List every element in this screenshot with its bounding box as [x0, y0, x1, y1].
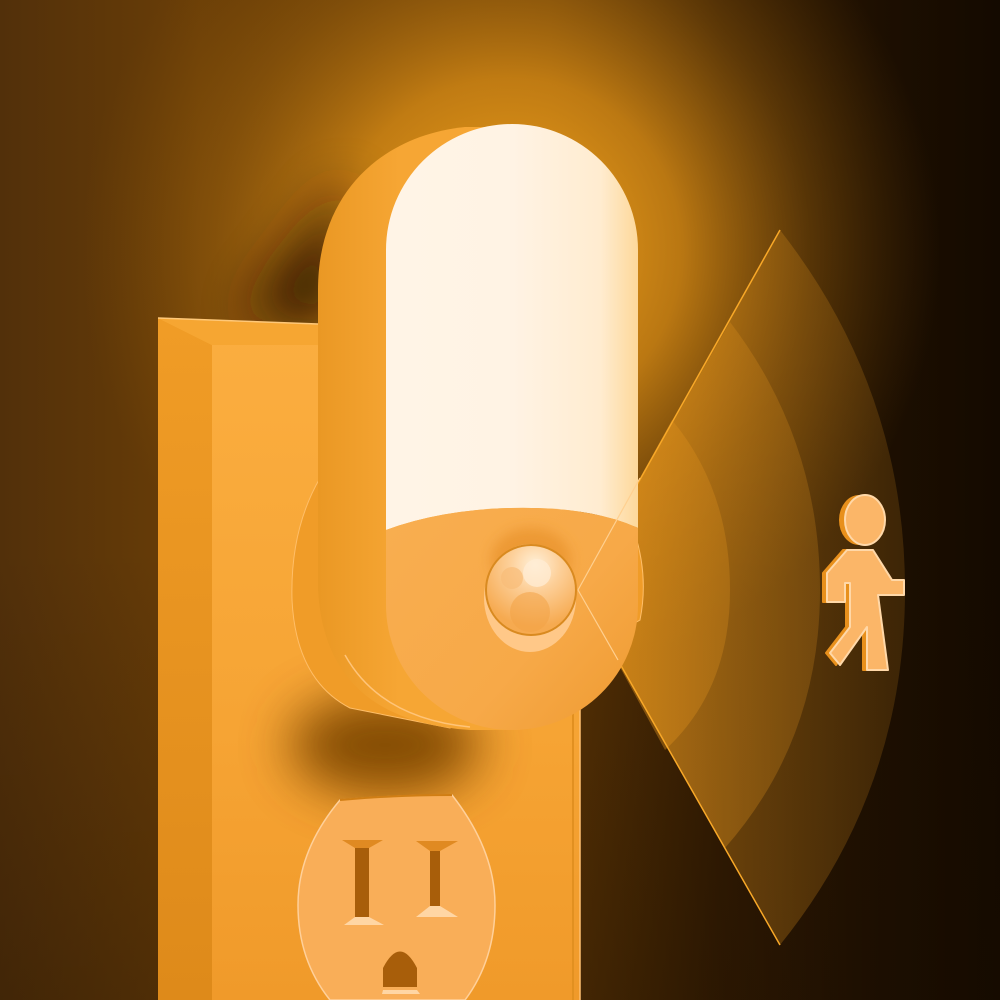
- sensor waves: [578, 230, 905, 945]
- outlet slot left: [342, 840, 384, 925]
- fan edges: [578, 230, 780, 945]
- lower base of front face: [386, 508, 638, 730]
- shadow of the lamp on the plate: [290, 695, 480, 795]
- outlet ground hole: [382, 952, 420, 994]
- lamp side body: [318, 127, 520, 730]
- outer wave: [578, 230, 905, 945]
- shadow of the lamp on the wall: [245, 175, 350, 330]
- lit lens: [386, 124, 638, 530]
- wall plate: [158, 318, 580, 1000]
- motion sensor: [484, 528, 577, 652]
- middle wave: [578, 322, 820, 848]
- outlet slot right: [416, 841, 458, 917]
- night light: [292, 124, 643, 730]
- person icon: [823, 495, 904, 670]
- inner wave: [578, 420, 730, 750]
- round plug base behind lamp: [292, 478, 643, 728]
- outlet: [298, 795, 495, 1000]
- fan lines over the lamp base: [578, 478, 640, 660]
